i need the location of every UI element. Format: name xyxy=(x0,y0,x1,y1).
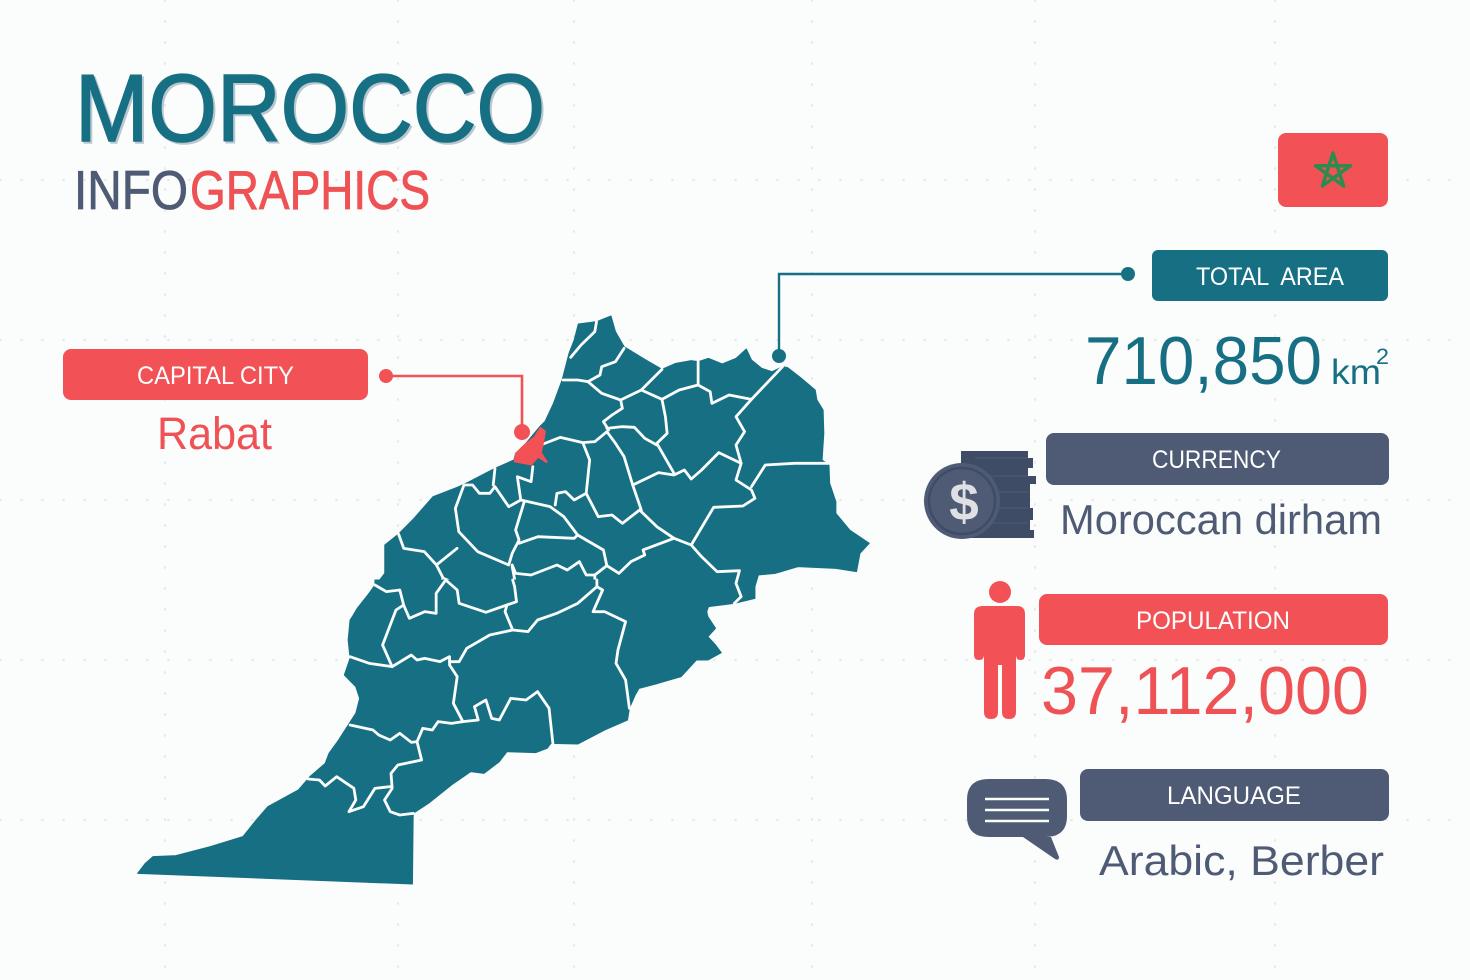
panel: total area xyxy=(1085,250,1389,399)
map: northern regions xyxy=(350,316,869,620)
subtitle: INFOGRAPHICS: INFO xyxy=(74,159,188,221)
currency label: CURRENCY xyxy=(1152,446,1281,474)
population label xyxy=(1039,594,1388,645)
icon: flag of Morocco xyxy=(1278,133,1388,207)
language label: LANGUAGE xyxy=(1167,782,1301,810)
title: MOROCCO: MOROCCO xyxy=(75,55,545,162)
currency value: Moroccan dirham xyxy=(1060,496,1382,543)
population value: 37,112,000 xyxy=(1041,653,1369,729)
capital city label xyxy=(63,349,368,400)
capital city value: Rabat xyxy=(157,408,272,459)
panel: population xyxy=(974,581,1388,729)
map: southern regions xyxy=(138,580,730,884)
language label xyxy=(1080,769,1389,821)
panel: language xyxy=(967,769,1389,884)
map of Morocco with regions xyxy=(138,316,869,884)
total area value: 710,850 xyxy=(1085,323,1322,399)
capital city label: CAPITAL CITY xyxy=(137,362,294,390)
subtitle: INFOGRAPHICS: GRAPHICS xyxy=(190,159,430,221)
total area label: TOTAL AREA xyxy=(1196,263,1344,291)
population label: POPULATION xyxy=(1136,607,1290,635)
total area value: 2 xyxy=(1376,344,1389,369)
panel: currency xyxy=(924,433,1389,543)
panel: capital city xyxy=(63,349,368,459)
highlighted capital region: Rabat xyxy=(515,428,547,464)
icon: dollar coins: $ xyxy=(949,473,979,532)
subtitle: INFOGRAPHICS xyxy=(74,159,430,221)
callout connector: total area xyxy=(772,267,1135,363)
currency label xyxy=(1046,433,1389,485)
language value: Arabic, Berber xyxy=(1099,837,1384,884)
callout connector: capital city xyxy=(379,369,530,440)
total area value: km xyxy=(1331,353,1381,392)
icon: person xyxy=(974,581,1025,719)
icon: speech bubble xyxy=(967,779,1067,860)
icon: dollar coins xyxy=(924,451,1036,539)
total area label xyxy=(1152,250,1388,301)
